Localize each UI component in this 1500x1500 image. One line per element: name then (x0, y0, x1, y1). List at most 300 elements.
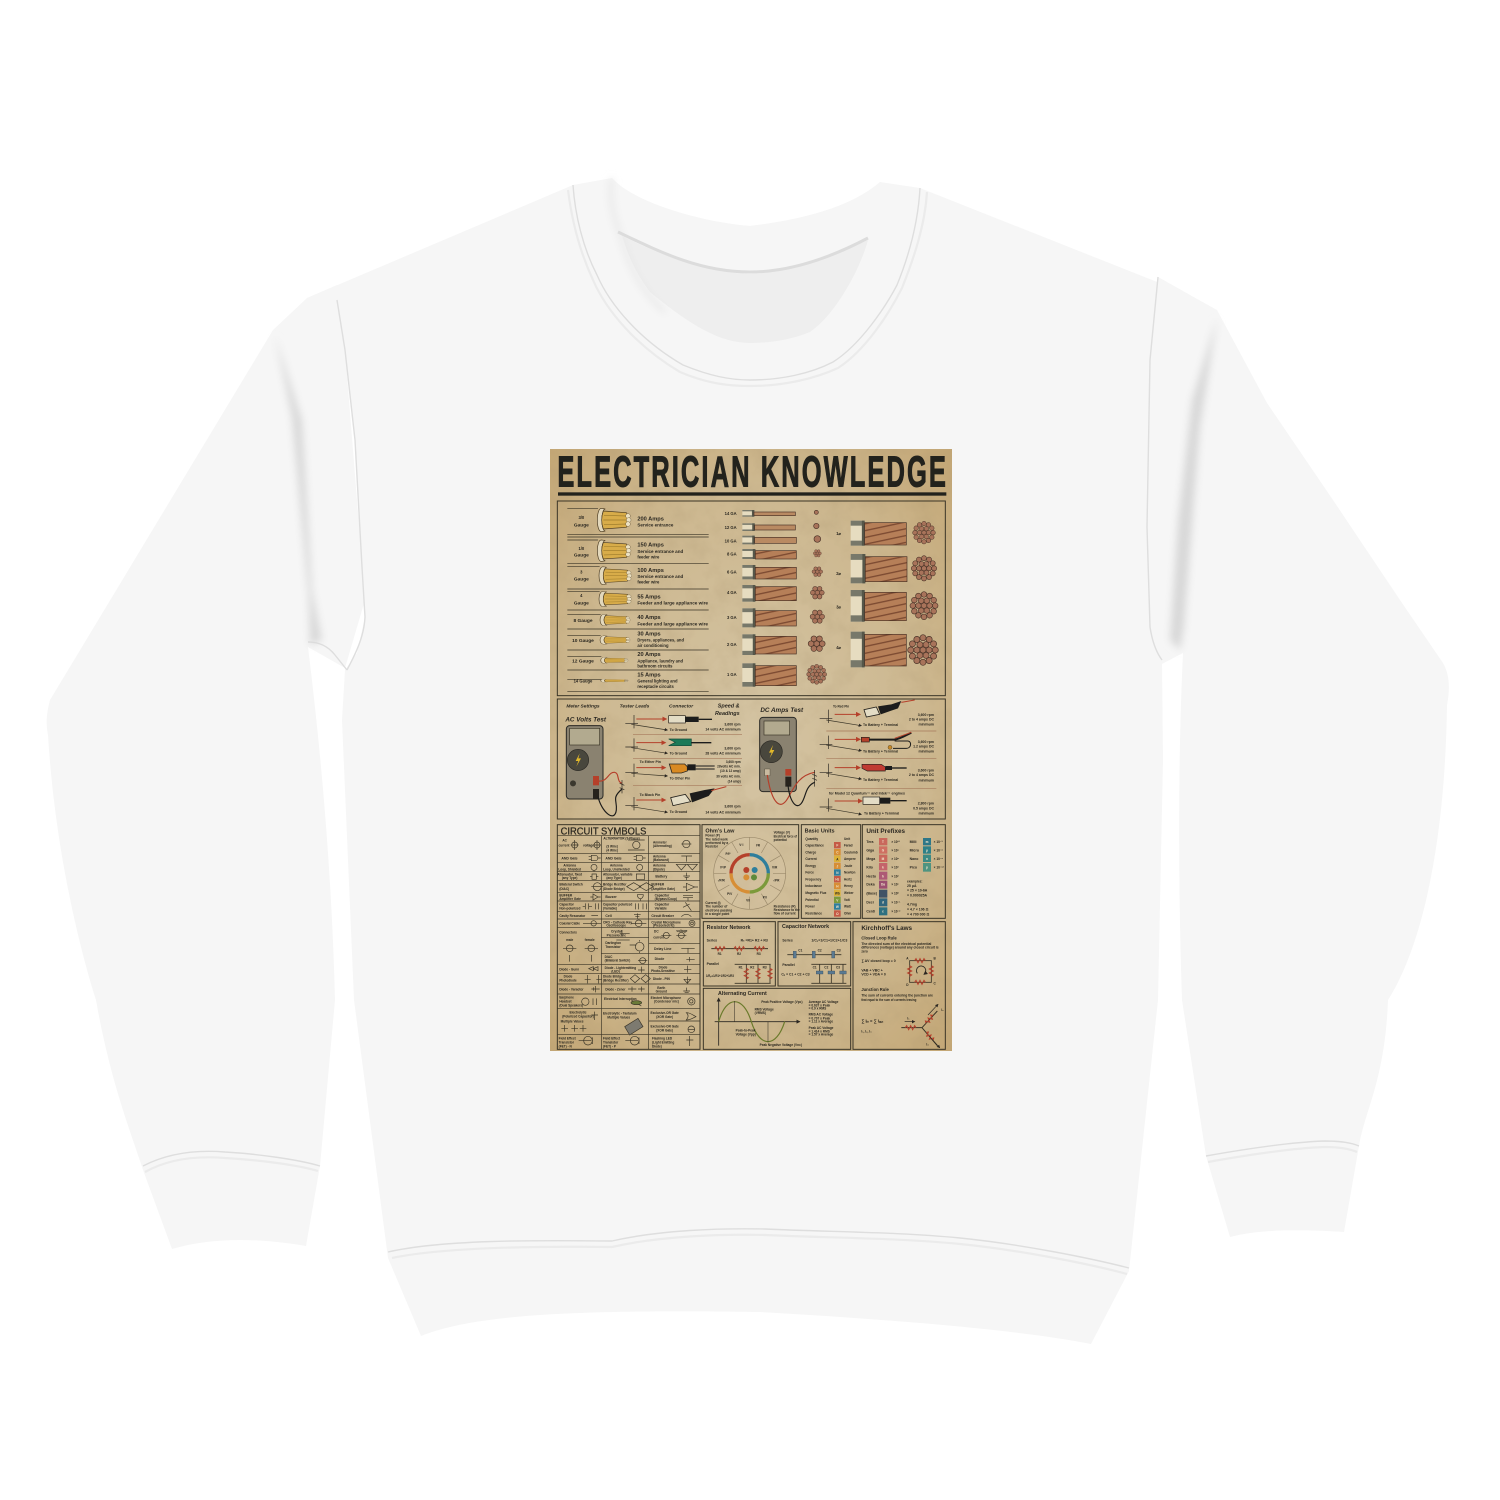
panel: wire gauges (557, 501, 945, 696)
series capacitors (787, 949, 841, 958)
panel: Capacitor Network: 1/Cₛ=1/C1+1/C2+1/C3 (811, 938, 848, 942)
column headings: Tester Leads (620, 703, 650, 709)
unit rows: H (836, 884, 839, 888)
column 3 labels: current (653, 935, 665, 939)
series capacitors: C3 (837, 949, 841, 953)
AC row 1: black connector: 3,600 rpm (724, 722, 741, 726)
column 2 labels: Electrical Interruption (604, 997, 637, 1001)
2/0: 2⌀ (836, 571, 842, 576)
unit rows: F (836, 844, 838, 848)
column 1 labels: (Polarized Capacitor) (562, 1014, 594, 1018)
panel: Resistor Network: Series (707, 938, 717, 942)
current note: The number of (705, 905, 728, 909)
column 2 labels: (Bridge Rectifier) (603, 979, 629, 983)
shirt body (307, 178, 1190, 1344)
formula wheel: V/R (772, 865, 778, 869)
series resistors: R1 (718, 952, 722, 956)
column 2 labels: (3 Wire) (606, 844, 618, 848)
row 3/0: Service entrance (637, 522, 674, 527)
row 3 gauge (574, 567, 684, 585)
examples (907, 879, 929, 916)
column 1 labels: Coaxial Cable (559, 922, 580, 926)
column 3 labels: Circuit Breaker (651, 914, 675, 918)
row 1/0: Gauge (574, 552, 589, 558)
6 GA: 6 GA (727, 569, 737, 574)
column 3 labels: Antenna (653, 854, 666, 858)
small prefixes: × 10⁻¹² (934, 865, 944, 869)
unit rows: V (836, 898, 839, 902)
closed loop rule: VAB + VBC + (861, 968, 883, 972)
panel: Alternating Current (703, 988, 851, 1049)
column 2 labels: (LED) (611, 969, 620, 973)
column 2 labels: Transistor (605, 945, 621, 949)
hem rib seam (388, 1229, 1129, 1268)
AC row 3: orange connector: 30 volts AC min. (716, 774, 741, 778)
unit rows: J (836, 864, 838, 868)
unit rows: Resistance (805, 912, 822, 916)
formula wheel (714, 837, 786, 909)
row 8 gauge: 8 Gauge (573, 618, 593, 624)
column 1 labels: Electrolytic (569, 1010, 587, 1014)
panel: Basic Units: Unit (844, 837, 851, 841)
panel: Ohm's Law: Ohm's Law (705, 828, 735, 834)
row 10 gauge: 10 Gauge (572, 638, 594, 644)
column 3 labels: Earth (657, 986, 665, 990)
14 GA: 14 GA (725, 511, 737, 516)
large prefixes: × 10⁶ (891, 857, 900, 861)
large prefixes: Centi (866, 909, 875, 913)
right sleeve (1140, 277, 1449, 1237)
voltage formulas: = 0.9 x RMS (809, 1007, 826, 1011)
closed loop rule: Closed Loop Rule (861, 935, 897, 940)
power note: The rated work (705, 837, 728, 841)
series resistors: R3 (757, 952, 761, 956)
examples: examples: (907, 879, 922, 883)
closed loop rule: zero (861, 949, 868, 953)
column 3 labels: Electret Microphone (651, 996, 681, 1000)
column 2 labels: DIAC (605, 955, 613, 959)
row 3/0: 200 Amps (637, 517, 664, 523)
column 1 labels: Antenna (563, 864, 576, 868)
voltage formulas (809, 1000, 839, 1037)
8 GA (727, 549, 821, 559)
4 GA (727, 585, 824, 602)
column headings: Connector (669, 703, 694, 709)
column 1 labels: Field Effect (559, 1036, 577, 1040)
column 3 labels: Flashing LED (652, 1036, 673, 1040)
column 2 labels: Electrolytic - Tantalum (603, 1012, 637, 1016)
DC row 1: red pin: 3,600 rpm (918, 713, 934, 717)
10 GA: 10 GA (725, 538, 737, 543)
closed loop rule (861, 935, 939, 976)
AC row 4: large connector: 14 volts AC minimum (705, 810, 741, 814)
column 3 labels: (Piezoelectric) (653, 924, 674, 928)
aught wire samples (836, 521, 938, 667)
panel: Capacitor Network: Capacitor Network (782, 924, 829, 930)
voltage note: Electrical force of (774, 834, 798, 838)
collar front edge shadow left (611, 178, 665, 312)
DC row 3: red connector (820, 764, 934, 782)
row dividers (567, 508, 709, 692)
column 1 labels: AND Gate (561, 856, 578, 860)
AC row 3: orange connector: (14 amp) (728, 779, 741, 783)
panel: Basic Units: Quantity (805, 837, 818, 841)
unit rows: N (836, 871, 839, 875)
formula wheel: P/V (727, 892, 733, 896)
examples: = 4.7 × 106 Ω (907, 907, 929, 911)
column 2 labels: Antenna (610, 864, 623, 868)
column 2 labels: (FET) - P (603, 1044, 616, 1048)
1 GA (727, 663, 827, 687)
DC row 1: red pin (820, 700, 934, 727)
small prefixes: × 10⁻³ (934, 840, 943, 844)
examples: = 0.000025A (907, 893, 928, 897)
junction diagram: I₃ (926, 1043, 929, 1047)
unit rows: Inductance (805, 884, 822, 888)
small prefixes: × 10⁻⁶ (934, 848, 944, 852)
column 3 labels (651, 840, 688, 1048)
column 1 labels: (any Type) (562, 876, 577, 880)
large prefixes: (Base) (866, 892, 877, 896)
column 3 labels: Exclusive-OR Gate (651, 1011, 679, 1015)
junction rule: The sum of currents entering the junction are (861, 993, 933, 997)
large prefixes: × 10⁻¹ (891, 900, 900, 904)
column 2 labels: AND Gate (605, 856, 622, 860)
DC row 4: small connector (820, 791, 934, 816)
back neck seam (618, 232, 868, 272)
AC row 4: large connector: To Black Pin (640, 793, 660, 797)
series resistors: R2 (737, 952, 741, 956)
current note (705, 901, 732, 916)
unit rows: Magnetic Flux (805, 891, 827, 895)
column 3 labels: (XOR Gate) (656, 1028, 673, 1032)
column 1 labels: Earphone (559, 996, 574, 1000)
DC row 3: red connector: minimum (918, 778, 934, 782)
column 3 labels: DC (654, 930, 659, 934)
column 1 labels: Diode - Gunn (559, 968, 579, 972)
parallel capacitors: C1 (813, 965, 817, 969)
unit rows: Volt (844, 898, 851, 902)
collar outer seam second line (568, 190, 927, 386)
AC row 3: orange connector: To Other Pin (670, 776, 690, 780)
formula wheel: I²R (756, 844, 761, 848)
column 3 labels: Diode - PIN (653, 977, 671, 981)
multimeter test section (557, 699, 945, 819)
column 2 labels: Loop, Unshielded (603, 867, 630, 871)
column 2 labels: CRO - Cathode Ray (603, 920, 632, 924)
row 1/0: 1/0 (578, 546, 585, 551)
row 4 gauge: 55 Amps (637, 594, 661, 600)
formula wheel: V²/P (720, 865, 726, 869)
DC row 3: red connector: 2 to 4 amps DC (909, 773, 934, 777)
heading: DC Amps Test: DC Amps Test (760, 707, 804, 714)
AC row 1: black connector (625, 715, 741, 732)
title rule (558, 492, 946, 496)
left armhole seam (337, 300, 365, 670)
series capacitors: C1 (798, 949, 803, 953)
parallel capacitors: C2 (824, 965, 829, 969)
unit rows: Ω (836, 912, 839, 916)
large prefixes: M (882, 857, 885, 861)
column 1 labels (557, 839, 595, 1048)
small prefixes: Pico (910, 865, 917, 869)
10 GA (725, 536, 821, 544)
panel: Capacitor Network: Parallel (782, 963, 795, 967)
column 1 labels: Cavity Resonator (559, 914, 586, 918)
examples: 4.7mg (907, 902, 917, 906)
column 1 labels: Diode - Varactor (559, 988, 584, 992)
parallel resistors (735, 964, 772, 983)
column 2 labels: ALTERNATOR (3-Phase) (603, 836, 640, 840)
small prefixes: × 10⁻⁹ (934, 857, 944, 861)
column 3 labels: Variable (655, 907, 667, 911)
amp rating rows (567, 508, 709, 692)
current note: Current (I) (705, 901, 721, 905)
junction rule: ∑ Iᵢₙ = ∑ Iₒᵤₜ (861, 1019, 884, 1024)
large prefixes: T (882, 840, 884, 844)
column 3 labels: Delay Line (654, 947, 671, 951)
DC row 4: small connector: To Battery + Terminal (864, 812, 899, 816)
waveform labels: (VRMS) (755, 1011, 766, 1015)
row 4 gauge: 4 (580, 593, 583, 598)
unit rows: Potential (805, 898, 819, 902)
column 1 labels: Photodiode (559, 979, 577, 983)
left cuff seam second line (145, 1157, 318, 1172)
junction diagram: I₁ (907, 1016, 910, 1020)
column 1 labels: (DIAC) (559, 887, 569, 891)
column 3 labels: (Balanced) (653, 858, 669, 862)
row 12 gauge: Appliance, laundry and (637, 658, 684, 663)
formula wheel: V·I (739, 843, 743, 847)
junction rule (861, 987, 933, 1034)
unit rows: Frequency (805, 877, 822, 881)
column 2 labels: Crystal (611, 930, 622, 934)
row 10 gauge: 30 Amps (637, 632, 661, 638)
column 3 labels: Crystal Microphone (651, 920, 681, 924)
column 1 labels: (FET) - N (559, 1044, 573, 1048)
1/0: 1⌀ (836, 531, 842, 536)
DC multimeter (760, 717, 817, 806)
underarm hem left (308, 642, 347, 670)
column headings: Meter Settings (566, 703, 600, 709)
loop circuit: B (934, 956, 937, 960)
column 3 labels: Exclusive-OR Gate (651, 1024, 679, 1028)
large prefixes: × 10⁰ (891, 892, 900, 896)
AC row 2: green connector: 3,600 rpm (724, 746, 741, 750)
row 4 gauge (574, 591, 709, 607)
panel: Unit Prefixes (862, 825, 945, 918)
voltage note (774, 831, 798, 842)
column 2 labels: (any Type) (606, 876, 622, 880)
column 1 labels: Transistor (559, 1040, 575, 1044)
DC row 3: red connector: To Battery + Terminal (863, 778, 898, 782)
large prefixes: Tera (866, 840, 873, 844)
unit rows: Coulomb (844, 850, 858, 854)
large prefixes: × 10¹ (891, 883, 899, 887)
poster stain texture (550, 449, 952, 1051)
waveform labels: Peak Positive Voltage (Vpc) (761, 1000, 803, 1004)
unit rows: Henry (844, 884, 853, 888)
junction diagram: I₂ (941, 1008, 944, 1012)
12 GA: 12 GA (725, 525, 737, 530)
voltage note: Voltage (V) (774, 831, 790, 835)
formula wheel: V/I (746, 899, 750, 903)
power note: performed by a (705, 841, 728, 845)
sleeve fold shadow left (275, 335, 322, 645)
power note: Resistor (705, 845, 719, 849)
row dividers (633, 731, 936, 788)
DC row 1: red pin: minimum (918, 723, 934, 727)
neck interior (622, 236, 868, 343)
column 3 labels: Battery (655, 875, 667, 879)
column 3 labels: Antenna (653, 864, 666, 868)
column 3 labels: BUFFER (651, 883, 665, 887)
2 GA (727, 634, 825, 655)
panel: Resistor Network: Resistor Network (707, 925, 751, 931)
column 1 labels: male (566, 938, 574, 942)
loop circuit: C (934, 982, 937, 986)
column 1 labels: Loop, Shielded (558, 867, 581, 871)
panel: Kirchhoff's Laws (853, 922, 945, 1049)
parallel resistors: R2 (750, 965, 755, 969)
poster print (550, 446, 952, 1051)
current note: electrons passing (705, 908, 732, 912)
large prefixes: G (882, 848, 885, 852)
left cuff seam (143, 1151, 320, 1166)
panel: meter tests (557, 699, 945, 819)
row 10 gauge: Dryers, appliances, and (637, 638, 684, 643)
panel: Resistor Network (703, 922, 775, 986)
column 2 labels: Diode Bridge (603, 974, 623, 978)
large prefixes: Hecto (866, 874, 876, 878)
formula wheel: √P/R (718, 879, 726, 883)
waveform labels: RMS Voltage (755, 1007, 774, 1011)
row 3/0: 3/0 (578, 515, 585, 520)
parallel capacitors: C3 (836, 965, 840, 969)
closed loop rule: differences (voltage) around any closed circuit is (861, 946, 939, 950)
resistance note: Resistance (R) (774, 904, 796, 908)
large prefixes (866, 838, 900, 915)
right armhole seam (1147, 277, 1162, 660)
left sleeve (47, 285, 365, 1249)
column 2 labels: (Bilateral Switch) (605, 959, 630, 963)
column 1 labels: (Dual Speakers) (559, 1004, 583, 1008)
row 3 gauge: feeder wire (637, 579, 660, 584)
row 12 gauge (572, 652, 684, 669)
column 2 labels: Field Effect (603, 1036, 621, 1040)
column 3 labels: Diode) (652, 1044, 662, 1048)
large prefixes: Deka (866, 883, 875, 887)
row 3 gauge: Service entrance and (637, 574, 684, 579)
closed loop rule: ∑ ΔV closed loop = 0 (861, 959, 896, 963)
3/0 (836, 590, 938, 622)
series capacitors: C2 (818, 949, 822, 953)
AC row 3: orange connector (625, 760, 741, 783)
closed loop rule: The directed sum of the electrical potential (861, 942, 931, 946)
row 12 gauge: 12 Gauge (572, 659, 594, 665)
column 1 labels: current (559, 844, 570, 848)
unit rows: Hz (835, 878, 840, 882)
AC row 4: large connector (625, 787, 741, 814)
row 14 gauge (574, 673, 678, 689)
AC row 2: green connector: To Ground (670, 751, 687, 755)
schematic symbols (561, 840, 698, 1046)
4 GA: 4 GA (727, 590, 737, 595)
2/0 (836, 554, 937, 583)
column 3 labels: voltage (676, 929, 688, 933)
junction rule: that equal to the sum of currents leaving (861, 998, 916, 1002)
column 3 labels: Capacitor (655, 903, 670, 907)
network and law panels (703, 922, 945, 1049)
collar outer seam (573, 185, 920, 380)
4/0: 4⌀ (836, 645, 842, 650)
unit rows: Force (805, 871, 814, 875)
column 1 labels: Connectors (559, 930, 577, 934)
column 2 labels: Transistor (603, 1040, 619, 1044)
unit rows: Current (805, 857, 818, 861)
resistance note: flow of current (774, 912, 797, 916)
row 1/0: Service entrance and (637, 549, 684, 554)
panel: Resistor Network: Parallel (707, 962, 719, 966)
current note: in a single point (705, 912, 730, 916)
AC row 1: black connector: 14 volts AC minimum (705, 728, 741, 732)
panel: Resistor Network: Rₛ =R1+ R2 + R3 (741, 938, 768, 942)
large prefixes: Da (881, 883, 885, 887)
AC row 3: orange connector: 28volts AC min. (717, 765, 741, 769)
column 1 labels: BUFFER (559, 893, 573, 897)
DC row 2: red and black pigtail: minimum (918, 750, 934, 754)
unit rows: Weber (844, 891, 854, 895)
junction rule: Junction Rule (861, 987, 889, 992)
panel: Capacitor Network: Cₚ = C1 + C2 + C3 (781, 973, 810, 977)
3 GA (727, 608, 825, 627)
AC row 2: green connector: 28 volts AC minimum (705, 752, 741, 756)
row 12 gauge: bathroom circuits (637, 664, 673, 669)
large prefixes: Mega (866, 857, 875, 861)
column 1 labels: Capacitor (559, 903, 575, 907)
column 2 labels: (Diode Bridge) (603, 887, 625, 891)
unit rows: Farad (844, 843, 853, 847)
large prefixes: d (882, 900, 884, 904)
row 4 gauge: Feeder and large appliance wire (637, 601, 709, 606)
column 1 labels: Non-polarized (559, 907, 580, 911)
small prefixes: μ (926, 848, 928, 852)
right cuff seam second line (1208, 1147, 1357, 1162)
panel: Kirchhoff's Laws: Kirchhoff's Laws (861, 925, 913, 932)
row 8 gauge: Feeder and large appliance wire (637, 621, 709, 626)
sine wave chart (715, 998, 800, 1046)
column 3 labels: Ammeter (653, 840, 667, 844)
panel: Basic Units: Basic Units (805, 828, 835, 834)
column 3 labels: (Condenser mic) (654, 1000, 679, 1004)
unit rows: Charge (805, 850, 816, 854)
2 GA: 2 GA (727, 642, 737, 647)
row 14 gauge: 15 Amps (637, 673, 661, 679)
parallel capacitors (811, 964, 846, 983)
formula wheel: P/I (763, 895, 767, 899)
unit rows: Joule (844, 864, 852, 868)
large prefixes: × 10³ (891, 865, 899, 869)
unit rows: Energy (805, 864, 816, 868)
row 12 gauge: 20 Amps (637, 652, 661, 658)
title: ELECTRICIAN KNOWLEDGE (557, 446, 946, 496)
row 3/0 (574, 508, 674, 532)
formula wheel: P/I² (726, 852, 730, 856)
column headings: Speed & (718, 704, 740, 710)
examples: = 4 700 000 Ω (907, 912, 929, 916)
power note: Power (P) (705, 834, 720, 838)
large prefixes: Deci (866, 900, 874, 904)
